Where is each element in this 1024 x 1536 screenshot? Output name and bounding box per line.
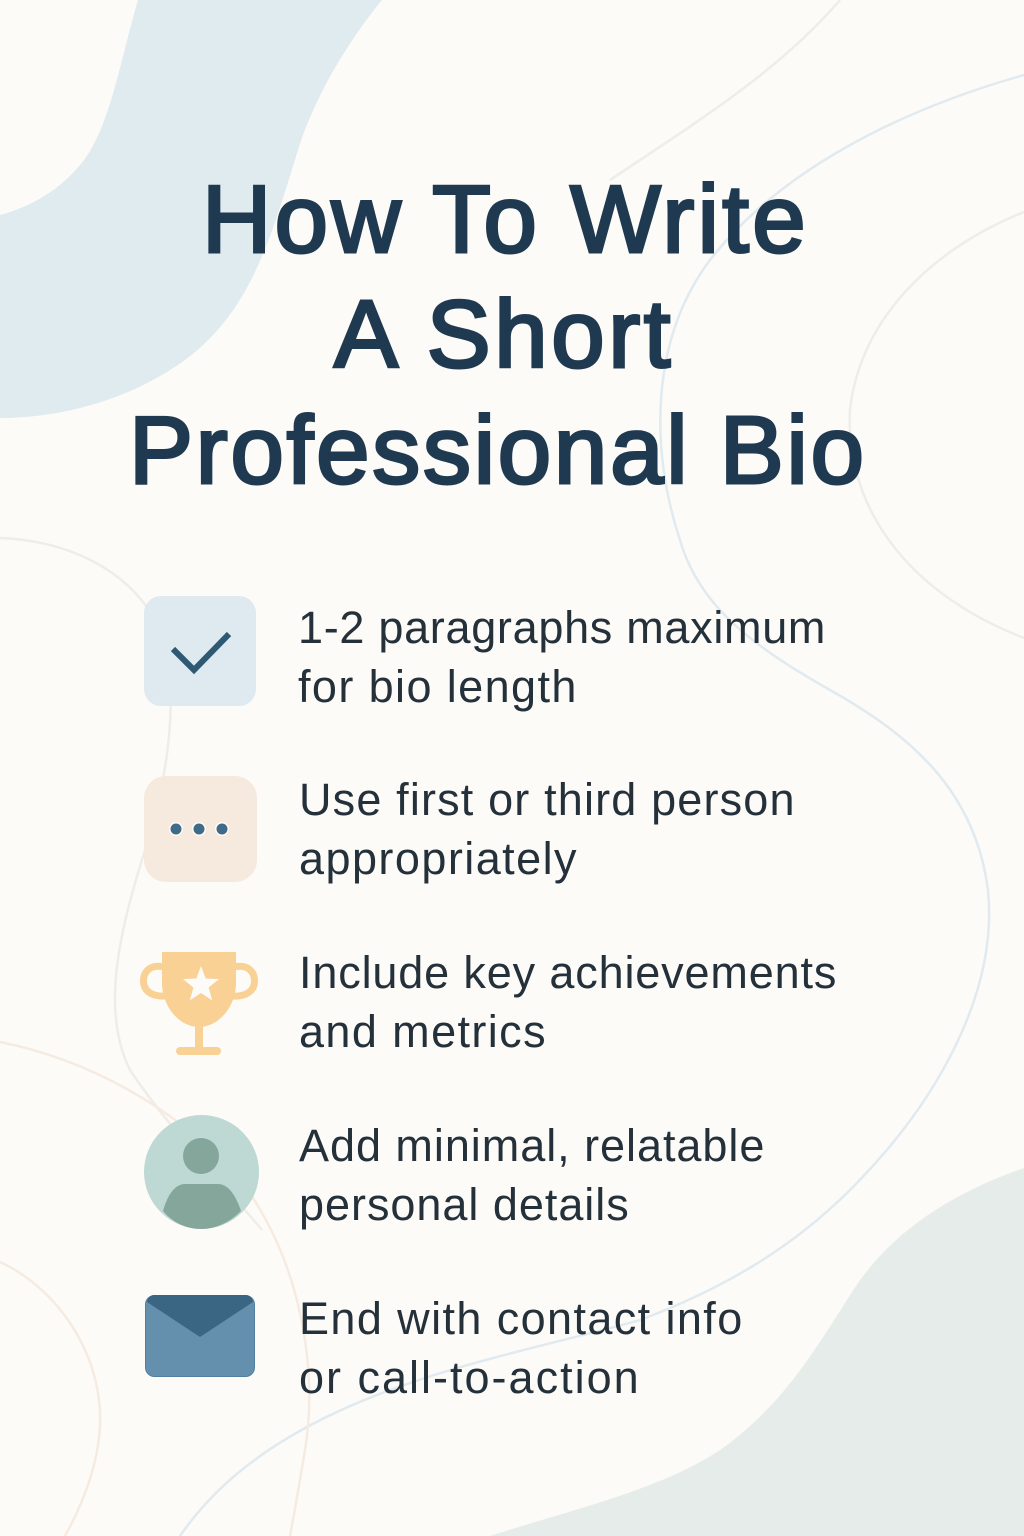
- text: personal details: [299, 1120, 765, 1230]
- text: person: Use first or third person: [299, 774, 796, 825]
- text: person: [299, 774, 796, 884]
- icon: check mark: [144, 596, 256, 706]
- title: Professional Bio: [129, 397, 867, 504]
- icon: trophy: [140, 952, 258, 1055]
- text: bio length: [298, 602, 826, 712]
- title: How To Write: [202, 166, 809, 273]
- text: contact info: or call-to-action: [299, 1352, 641, 1403]
- text: bio length: 1-2 paragraphs maximum: [298, 602, 826, 653]
- text: contact info: End with contact info: [299, 1293, 744, 1344]
- title: A Short: [334, 281, 674, 388]
- text: achievements: and metrics: [299, 1006, 547, 1057]
- text: person: appropriately: [299, 833, 578, 884]
- text: personal details: Add minimal, relatable: [299, 1120, 765, 1171]
- icon: envelope: [145, 1295, 255, 1377]
- title: [129, 166, 867, 504]
- text: achievements: Include key achievements: [299, 947, 837, 998]
- text: contact info: [299, 1293, 744, 1403]
- text: bio length: for bio length: [298, 661, 578, 712]
- text: achievements: [299, 947, 837, 1057]
- icon: speech dots: [144, 776, 257, 882]
- text: personal details: personal details: [299, 1179, 630, 1230]
- icon: person avatar: [144, 1115, 259, 1229]
